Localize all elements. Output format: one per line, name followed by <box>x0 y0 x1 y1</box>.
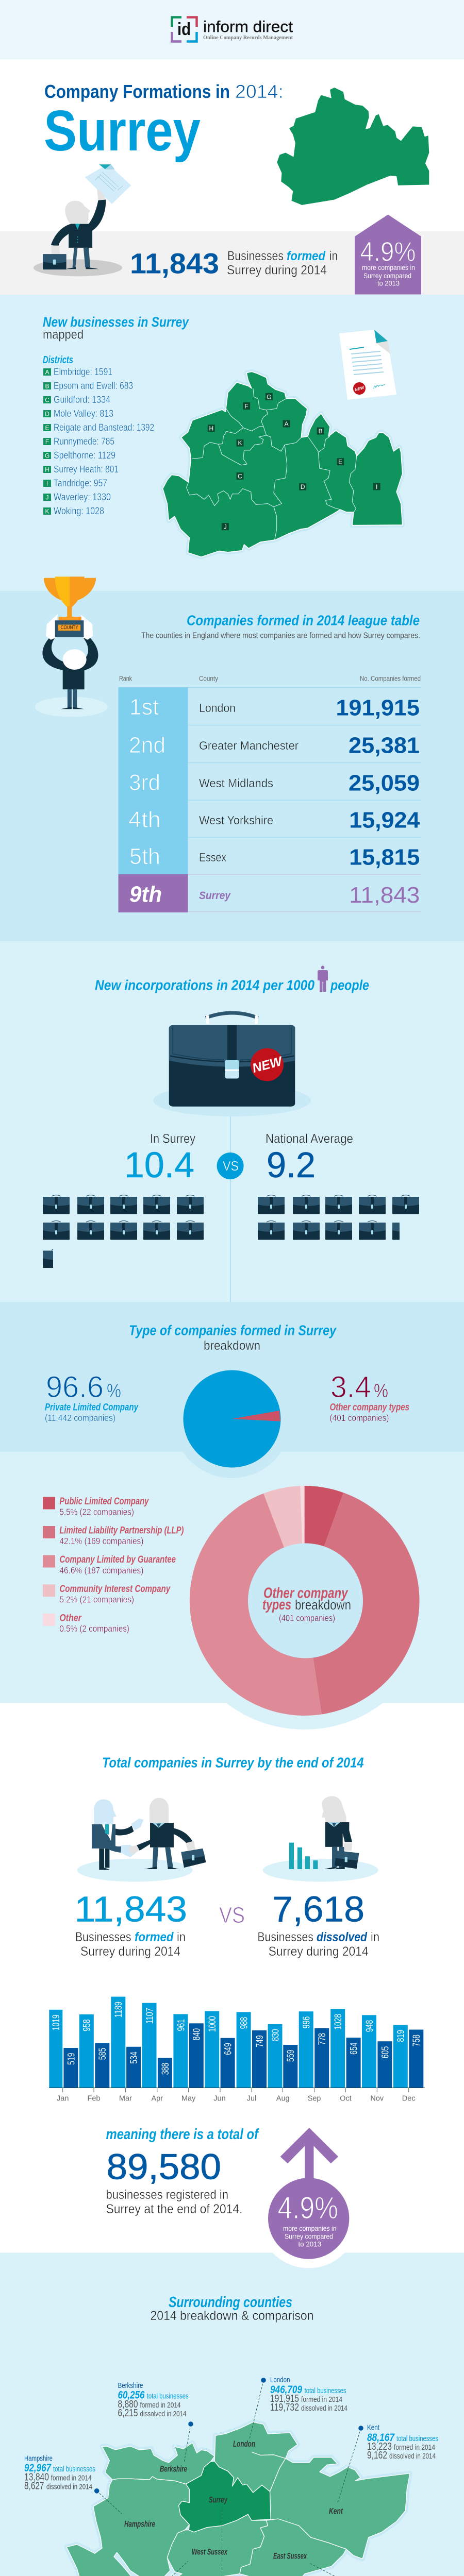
table: companies formed league table: West Midlands <box>199 776 273 790</box>
chart: monthly formed and dissolved bars: 1028 <box>333 2014 344 2030</box>
chart: monthly formed and dissolved bars: Jan <box>57 2095 69 2103</box>
icon: new company document: NEW <box>354 385 366 392</box>
legend: districts list: Mole Valley: 813 <box>54 409 113 419</box>
panel: intro background <box>0 59 464 231</box>
panel: surrounding counties background <box>0 2252 464 2576</box>
map: county names: Surrey <box>209 2495 228 2505</box>
stat: 11,843 vs 7,618: formed <box>135 1930 174 1944</box>
legend: districts list: Waverley: 1330 <box>54 492 111 503</box>
chart: monthly formed and dissolved bars: 1189 <box>113 2002 124 2018</box>
legend: districts list: I <box>46 480 48 487</box>
callout: 4.9% arrow and circle: to 2013 <box>298 2240 321 2248</box>
callout: Kent: 9,162 <box>367 2450 387 2461</box>
stat: 96.6% private limited: (11,442 companies) <box>45 1413 115 1423</box>
illustration: businessman holding document <box>34 164 131 276</box>
map: Surrey districts: I <box>376 483 377 490</box>
comparison: 10.4 vs 9.2: National Average <box>266 1131 353 1146</box>
chart: monthly formed and dissolved bars: 958 <box>82 2019 93 2031</box>
heading: New businesses in Surrey mapped: mapped <box>43 328 84 342</box>
map: county names: East Sussex <box>273 2551 307 2561</box>
table: companies formed league table: Rank <box>119 675 132 682</box>
stat: 3.4% other types: % <box>374 1380 388 1401</box>
callout: London: total businesses <box>305 2386 346 2395</box>
comparison: 10.4 vs 9.2: 9.2 <box>267 1145 316 1185</box>
table: companies formed league table: Essex <box>199 851 226 864</box>
legend: other company types <box>43 1496 184 1634</box>
stat: 11,843 vs 7,618: Businesses <box>257 1930 313 1944</box>
stat: 11,843 businesses formed: Surrey during 2014 <box>227 263 327 277</box>
logo: inform direct: id <box>177 20 191 39</box>
chart: monthly formed and dissolved bars: 534 <box>129 2052 140 2064</box>
table: companies formed league table: 3rd <box>129 770 160 795</box>
table: companies formed league table: 25,059 <box>349 771 420 796</box>
callout: London: 191,915 <box>270 2393 299 2404</box>
callout: 4.9% more companies house <box>355 214 421 295</box>
callout: Hampshire <box>24 2454 95 2492</box>
chart: monthly formed and dissolved bars: 605 <box>380 2046 391 2058</box>
panel: districts background <box>0 295 464 591</box>
map: Surrey districts: E <box>338 459 342 466</box>
stat: 96.6% private limited <box>45 1370 139 1423</box>
illustration: businessmen shaking hands <box>77 1798 206 1882</box>
illustration: man holding county trophy <box>35 577 108 717</box>
logo: inform direct <box>172 18 293 41</box>
callout: Kent: dissolved in 2014 <box>389 2452 436 2461</box>
callout: Hampshire: 8,627 <box>24 2480 44 2492</box>
table: companies formed league table <box>119 675 421 912</box>
legend: districts list: Tandridge: 957 <box>54 478 107 489</box>
legend: other company types: Community Interest Company <box>59 1584 171 1595</box>
chart: company type pie <box>173 1360 291 1478</box>
map: county names: Kent <box>329 2506 343 2516</box>
callout: London: 946,709 <box>270 2384 302 2396</box>
icon: big briefcase with new badge: NEW <box>251 1054 285 1076</box>
heading: Surrounding counties: 2014 breakdown & comparison <box>151 2309 313 2323</box>
comparison: 10.4 vs 9.2 <box>124 1116 353 1302</box>
legend: districts list: Epsom and Ewell: 683 <box>54 381 133 392</box>
heading: New incorporations per 1000 people <box>95 966 369 993</box>
table: companies formed league table: No. Companies formed <box>360 675 421 682</box>
map: leader dots <box>94 2378 363 2576</box>
table: companies formed league table: 5th <box>129 844 160 869</box>
table: companies formed league table: 15,924 <box>349 808 420 833</box>
stat: 11,843 vs 7,618: VS <box>219 1903 245 1928</box>
chart: other types donut <box>176 1472 434 1730</box>
panel: league table 2014 background <box>0 591 464 941</box>
callout: 4.9% arrow and circle: Surrey compared <box>285 2232 333 2240</box>
panel: headline stat band <box>0 231 464 295</box>
icon: big briefcase with new badge <box>153 1013 311 1116</box>
stat: 96.6% private limited: 96.6 <box>46 1370 104 1404</box>
map: surrounding counties <box>67 2378 410 2576</box>
heading: New businesses in Surrey mapped: New businesses in Surrey <box>43 314 190 330</box>
stat: 3.4% other types <box>330 1370 409 1423</box>
table: companies formed league table: 15,815 <box>349 844 420 870</box>
chart: monthly formed and dissolved bars: 1107 <box>144 2008 155 2024</box>
stat: total of 89,580 <box>106 2126 260 2216</box>
callout: 4.9% more companies house: to 2013 <box>377 279 400 287</box>
panel: incorporations per 1000 background <box>0 941 464 1302</box>
comparison: 10.4 vs 9.2: In Surrey <box>150 1131 195 1146</box>
panel: header background <box>0 0 464 59</box>
stat: 11,843 vs 7,618: Surrey during 2014 <box>80 1944 180 1959</box>
callout: Berkshire: 8,880 <box>118 2399 138 2410</box>
chart: monthly formed and dissolved bars: 585 <box>97 2048 108 2060</box>
callout: London: formed in 2014 <box>301 2395 342 2404</box>
legend: districts list: Runnymede: 785 <box>54 436 114 447</box>
chart: monthly formed and dissolved bars: 961 <box>176 2019 187 2031</box>
map: county names: London <box>233 2439 255 2449</box>
legend: districts list: G <box>45 452 49 460</box>
callout: 4.9% more companies house: 4.9% <box>360 237 416 267</box>
chart: monthly formed and dissolved bars: 948 <box>364 2020 375 2032</box>
chart: monthly formed and dissolved bars: 840 <box>192 2028 203 2040</box>
map: Surrey districts <box>163 371 403 557</box>
legend: districts list: Surrey Heath: 801 <box>54 464 119 475</box>
chart: other types donut: Other company <box>263 1585 349 1601</box>
map: Surrey districts: D <box>301 483 305 490</box>
stat: 11,843 businesses formed: Businesses <box>227 249 284 263</box>
stat: total of 89,580: businesses registered in <box>106 2188 228 2202</box>
callout: Hampshire: Hampshire <box>24 2454 53 2463</box>
callout: 4.9% arrow and circle: 4.9% <box>277 2191 338 2225</box>
legend: districts list: F <box>45 438 49 445</box>
heading: Companies formed in 2014 league table: The counties in England where most companies are formed and how Surrey compares. <box>141 632 420 640</box>
heading: Surrounding counties <box>151 2294 313 2323</box>
callout: Hampshire: 13,840 <box>24 2471 49 2483</box>
chart: monthly formed and dissolved bars: 988 <box>239 2017 250 2029</box>
chart: monthly formed and dissolved bars: 778 <box>317 2033 328 2045</box>
table: companies formed league table: 25,381 <box>349 733 420 758</box>
table: companies formed league table: 11,843 <box>349 883 420 908</box>
callout: 4.9% arrow and circle: more companies in <box>283 2224 337 2232</box>
chart: monthly formed and dissolved bars: 559 <box>286 2049 296 2062</box>
callout: Berkshire <box>118 2381 189 2419</box>
table: companies formed league table: London <box>199 701 236 715</box>
logo: inform direct: inform direct <box>203 18 293 36</box>
chart: monthly formed and dissolved bars: 830 <box>270 2029 281 2041</box>
map: Surrey districts: G <box>267 393 271 400</box>
stat: 11,843 vs 7,618: dissolved <box>317 1930 368 1944</box>
table: companies formed league table: West Yorkshire <box>199 814 273 827</box>
legend: districts list: Reigate and Banstead: 1392 <box>54 422 154 433</box>
legend: districts list: Elmbridge: 1591 <box>54 367 112 378</box>
chart: monthly formed and dissolved bars: 388 <box>160 2063 171 2075</box>
callout: Hampshire: 92,967 <box>24 2462 52 2474</box>
stat: 96.6% private limited: Private Limited Company <box>45 1402 139 1413</box>
icon: new company document <box>339 330 396 400</box>
heading: New businesses in Surrey mapped <box>43 314 190 342</box>
pictogram: Surrey 10.4 briefcases <box>43 1195 204 1268</box>
callout: Hampshire: dissolved in 2014 <box>46 2482 92 2491</box>
chart: monthly formed and dissolved bars: 654 <box>349 2042 360 2055</box>
callout: London: 119,732 <box>270 2402 299 2413</box>
map: county names: West Sussex <box>192 2547 228 2556</box>
panel: other types background <box>0 1452 464 1703</box>
table: companies formed league table: 191,915 <box>336 695 420 720</box>
icon: logo brackets <box>172 18 197 41</box>
callout: Kent <box>367 2424 438 2461</box>
table: companies formed league table: County <box>199 675 218 682</box>
legend: other company types: Limited Liability Partnership (LLP) <box>59 1525 184 1536</box>
heading: Total companies in Surrey by the end of 2014: Total companies in Surrey by the end of 2014 <box>102 1754 364 1770</box>
map: Surrey districts: H <box>209 425 213 432</box>
chart: monthly formed and dissolved bars: Aug <box>276 2095 290 2103</box>
legend: districts list: Spelthorne: 1129 <box>54 450 115 461</box>
comparison: 10.4 vs 9.2: 10.4 <box>124 1145 194 1185</box>
pictogram: national 9.2 briefcases <box>258 1195 419 1240</box>
legend: districts list: E <box>45 425 49 432</box>
chart: monthly formed and dissolved bars: 758 <box>411 2035 422 2046</box>
table: companies formed league table: Surrey <box>199 890 231 902</box>
callout: Berkshire: formed in 2014 <box>140 2401 180 2410</box>
legend: districts list: A <box>45 369 49 376</box>
illustration: businessman with falling bars <box>263 1796 378 1882</box>
heading: Companies formed in 2014 league table: Companies formed in 2014 league table <box>187 612 420 629</box>
stat: 96.6% private limited: % <box>107 1380 121 1401</box>
legend: other company types: Other <box>59 1613 82 1623</box>
callout: 4.9% arrow and circle <box>259 2128 358 2268</box>
map: county names: Berkshire <box>160 2464 187 2474</box>
table: companies formed league table: Greater Manchester <box>199 739 299 752</box>
title: Company Formations in 2014 Surrey: Surrey <box>44 99 201 163</box>
panel: company types background <box>0 1302 464 1452</box>
legend: districts list: Woking: 1028 <box>54 506 104 517</box>
chart: monthly formed and dissolved bars: Oct <box>340 2095 352 2103</box>
callout: Hampshire: total businesses <box>53 2465 95 2473</box>
map: halo <box>67 2422 410 2576</box>
map: county names: Hampshire <box>124 2519 155 2529</box>
icon: person <box>318 966 328 992</box>
stat: 11,843 vs 7,618: in <box>177 1930 186 1944</box>
callout: Kent: 88,167 <box>367 2432 395 2444</box>
stat: 3.4% other types: (401 companies) <box>330 1413 389 1423</box>
callout: Berkshire: Berkshire <box>118 2381 143 2390</box>
legend: districts list: H <box>45 466 49 473</box>
map: Surrey districts: J <box>224 523 227 531</box>
legend: other company types: 0.5% (2 companies) <box>59 1623 129 1634</box>
callout: Berkshire: total businesses <box>147 2392 189 2401</box>
chart: monthly formed and dissolved bars: Dec <box>402 2095 416 2103</box>
legend: other company types: Public Limited Company <box>59 1496 150 1507</box>
callout: Berkshire: 60,256 <box>118 2389 145 2401</box>
legend: districts list: J <box>45 494 48 501</box>
legend: districts list: Guildford: 1334 <box>54 395 110 405</box>
panel: total companies background <box>0 1703 464 2252</box>
chart: monthly formed and dissolved bars: Nov <box>370 2095 384 2103</box>
chart: monthly formed and dissolved bars <box>49 1997 425 2103</box>
heading: Type of companies formed in Surrey: Type of companies formed in Surrey <box>129 1322 337 1338</box>
chart: other types donut: types <box>262 1597 291 1613</box>
legend: districts list: B <box>45 382 49 389</box>
table: companies formed league table: 1st <box>129 694 159 720</box>
stat: total of 89,580: 89,580 <box>106 2146 221 2187</box>
heading: Type of companies formed in Surrey: breakdown <box>204 1338 260 1353</box>
map: Surrey districts: K <box>238 439 242 447</box>
stat: 11,843 businesses formed <box>130 247 338 279</box>
table: companies formed league table: 9th <box>129 882 162 907</box>
callout: Kent: 13,223 <box>367 2441 392 2452</box>
chart: monthly formed and dissolved bars: 749 <box>255 2035 266 2047</box>
map: Surrey districts: C <box>238 473 242 480</box>
legend: districts list: K <box>45 508 49 515</box>
stat: 11,843 vs 7,618: Surrey during 2014 <box>269 1944 369 1959</box>
map: Surrey outline <box>277 88 429 205</box>
title: Company Formations in 2014 Surrey: 2014: <box>235 81 284 102</box>
heading: Companies formed in 2014 league table <box>141 612 420 640</box>
stat: 11,843 vs 7,618 <box>74 1889 379 1959</box>
stat: total of 89,580: Surrey at the end of 2014. <box>106 2202 242 2216</box>
heading: New incorporations per 1000 people: New incorporations in 2014 per 1000 <box>95 977 314 993</box>
table: companies formed league table: 4th <box>128 807 161 833</box>
heading: New incorporations per 1000 people: people <box>330 977 369 993</box>
legend: other company types: 5.5% (22 companies) <box>59 1507 134 1517</box>
callout: London: dissolved in 2014 <box>301 2404 347 2413</box>
chart: monthly formed and dissolved bars: Apr <box>152 2095 163 2103</box>
stat: 3.4% other types: 3.4 <box>330 1370 371 1404</box>
legend: other company types: 5.2% (21 companies) <box>59 1595 134 1605</box>
chart: other types donut: (401 companies) <box>279 1613 335 1623</box>
map: county fills <box>67 2422 410 2576</box>
chart: other types donut: breakdown <box>295 1597 351 1613</box>
logo: inform direct: Online Company Records Management <box>203 35 293 41</box>
legend: other company types: 42.1% (169 companies) <box>59 1536 143 1546</box>
chart: monthly formed and dissolved bars: 819 <box>396 2030 407 2042</box>
map: Surrey districts: F <box>244 403 248 410</box>
callout: Kent: total businesses <box>396 2434 438 2443</box>
label: COUNTY: COUNTY <box>61 625 78 631</box>
stat: 11,843 vs 7,618: 7,618 <box>272 1889 364 1929</box>
legend: districts list: D <box>45 410 49 417</box>
stat: 11,843 vs 7,618: in <box>371 1930 379 1944</box>
legend: districts list: Districts <box>43 354 73 366</box>
callout: Berkshire: 6,215 <box>118 2408 138 2419</box>
heading: Type of companies formed in Surrey <box>129 1322 337 1353</box>
chart: monthly formed and dissolved bars: Feb <box>88 2095 100 2103</box>
callout: 4.9% more companies house: more companies in <box>362 263 415 272</box>
chart: monthly formed and dissolved bars: May <box>181 2095 196 2103</box>
stat: 11,843 businesses formed: formed <box>287 249 326 263</box>
callout: Kent: Kent <box>367 2424 380 2432</box>
map: leader lines <box>97 2380 361 2576</box>
legend: other company types: 46.6% (187 companies) <box>59 1565 143 1575</box>
chart: monthly formed and dissolved bars: 1019 <box>51 2014 62 2030</box>
chart: monthly formed and dissolved bars: Sep <box>308 2095 321 2103</box>
map: county names <box>124 2439 343 2561</box>
chart: monthly formed and dissolved bars: 1000 <box>207 2016 218 2032</box>
chart: monthly formed and dissolved bars: Jul <box>247 2095 256 2103</box>
callout: Kent: formed in 2014 <box>394 2443 435 2452</box>
callout: London <box>270 2376 347 2413</box>
comparison: 10.4 vs 9.2: VS <box>223 1158 239 1174</box>
stat: 11,843 businesses formed: in <box>329 249 338 263</box>
stat: total of 89,580: meaning there is a total of <box>106 2126 260 2143</box>
legend: districts list <box>43 354 154 517</box>
callout: London: London <box>270 2376 290 2384</box>
map: Surrey districts: B <box>319 428 323 435</box>
stat: 11,843 vs 7,618: 11,843 <box>74 1889 187 1929</box>
callout: Hampshire: formed in 2014 <box>51 2473 92 2482</box>
chart: monthly formed and dissolved bars: Jun <box>213 2095 226 2103</box>
stat: 11,843 businesses formed: 11,843 <box>130 247 219 279</box>
heading: Surrounding counties: Surrounding counties <box>169 2294 292 2311</box>
callout: 4.9% more companies house: Surrey compared <box>363 272 411 280</box>
callout: Berkshire: dissolved in 2014 <box>140 2410 187 2418</box>
stat: 3.4% other types: Other company types <box>330 1402 409 1413</box>
legend: other company types: Company Limited by Guarantee <box>59 1554 176 1565</box>
map: Surrey districts: A <box>285 420 289 428</box>
chart: monthly formed and dissolved bars: 996 <box>302 2016 312 2028</box>
title: Company Formations in 2014 Surrey <box>44 81 284 163</box>
chart: monthly formed and dissolved bars: Mar <box>119 2095 132 2103</box>
chart: monthly formed and dissolved bars: 649 <box>223 2043 234 2055</box>
table: companies formed league table: 2nd <box>129 733 165 758</box>
chart: monthly formed and dissolved bars: 519 <box>66 2053 77 2065</box>
stat: 11,843 vs 7,618: Businesses <box>75 1930 131 1944</box>
legend: districts list: C <box>45 397 49 404</box>
title: Company Formations in 2014 Surrey: Company Formations in <box>44 81 230 102</box>
